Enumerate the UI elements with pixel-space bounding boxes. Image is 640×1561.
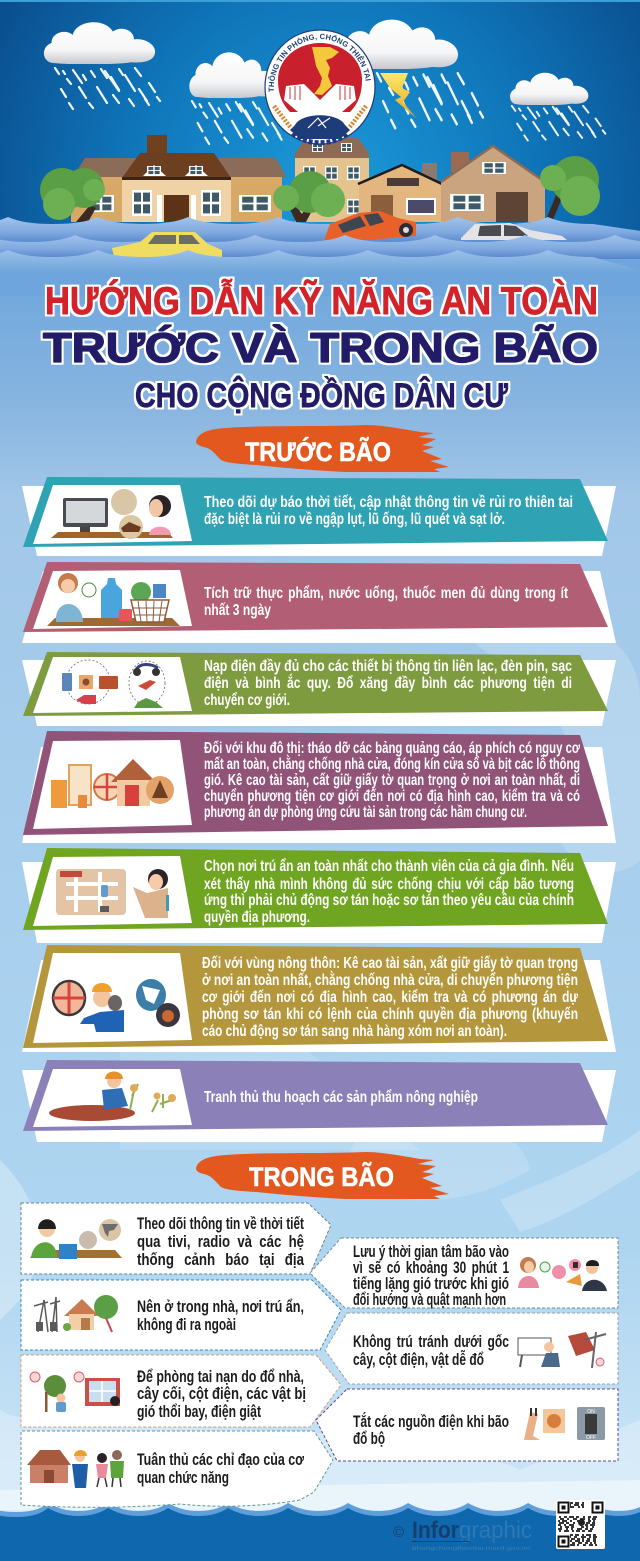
text [353,1412,509,1448]
text: không đi ra ngoài [137,1316,236,1334]
icon: man with radio [30,1219,122,1259]
cloud 3 [338,20,458,69]
text [137,1368,306,1421]
sky [0,0,640,240]
text [137,1451,304,1487]
icon: pylons, house, tree [34,1295,118,1332]
header scene [0,0,640,268]
text: tiếng lặng gió trước khi gió [353,1275,509,1293]
text: qua tivi, radio và các hệ [137,1233,304,1251]
lightning bolt [380,73,416,118]
icon: woman, bubbles, man with megaphone [518,1257,607,1291]
footer logo: Inforgraphic: graphic [459,1517,532,1544]
title [43,279,598,415]
text: thống cảnh báo tại địa [137,1251,305,1269]
text [137,1298,304,1334]
rain 3 [377,73,483,128]
tree centre [273,171,345,222]
text: cây cối, cột điện, các vật bị [137,1385,306,1403]
logo laurel left [274,106,291,128]
text: Tuân thủ các chỉ đạo của cơ [137,1451,304,1469]
white car [461,223,567,240]
heading: Trong bão [196,1152,449,1199]
text: đổi hướng và quật mạnh hơn [353,1291,506,1309]
text: chuyển cơ giới. [204,692,290,709]
card: stay indoors [21,1280,341,1350]
icon: devices and fuel [62,660,165,708]
wave band [0,1503,640,1561]
logo map of Vietnam [312,47,339,95]
icon: building and evacuees [27,1450,124,1488]
text [204,494,573,528]
card: no sheltering under trees [325,1313,618,1384]
text: nhất 3 ngày [204,602,271,619]
text: quan chức năng [137,1469,229,1487]
panel: harvest [22,1060,616,1142]
card: storm eye [310,1238,618,1309]
text [204,658,572,709]
card: follow authorities [21,1431,333,1507]
background swirls [0,620,640,1520]
icon: plug, socket and switch: OFF [586,1435,596,1441]
text: Theo dõi thông tin về thời tiết [137,1215,304,1233]
panel: weather forecast [22,477,616,556]
cloud 1 [44,22,155,64]
footer logo: Inforgraphic: Infor [412,1517,459,1544]
logo gear and mountain [290,115,350,143]
footer logo: Inforgraphic: phongchongthientai.mard.gov.vn [412,1546,530,1552]
icon: farmer in field [49,1072,176,1121]
title line 2: TRƯỚC VÀ TRONG BÃO [43,323,598,371]
footer logo: Inforgraphic: © [393,1524,404,1541]
text: Không trú tránh dưới gốc [353,1333,509,1351]
heading: Trong bão: TRONG BÃO [249,1161,394,1192]
text [353,1243,509,1309]
panel: urban areas [22,731,616,843]
house: small wood [358,163,442,222]
cloud 2 [189,52,278,98]
logo laurel right [349,106,366,128]
orange car [324,211,416,240]
text: đặc biệt là rủi ro về ngập lụt, lũ ống, lũ quét và sạt lở. [204,511,505,528]
card: follow news [21,1203,331,1274]
icon: man, billboard, flying roof [518,1332,606,1368]
QR code [556,1500,605,1549]
logo red disc [278,43,362,112]
icon: worker with megaphone [53,979,180,1032]
cloud 4 [510,73,588,105]
water layer 1 [0,217,640,244]
panel: stockpile [22,562,616,643]
heading: Trước bão: TRƯỚC BÃO [245,436,391,467]
rain 4 [512,106,605,140]
text: vì sẽ có khoảng 30 phút 1 [353,1259,509,1277]
text: Lưu ý thời gian tâm bão vào [353,1243,509,1261]
text: đổ bộ [353,1430,385,1448]
icon: plug, socket and switch: ON [587,1409,595,1415]
tree right [540,156,600,222]
panel: choose shelter [22,848,616,943]
text: cây, cột điện, vật dễ đổ [353,1350,484,1369]
text: Tranh thủ thu hoạch các sản phẩm nông nghiệp [204,1089,478,1106]
text [204,858,574,926]
text [202,955,579,1040]
text: cáo chủ động sơ tán sang nhà hàng xóm nơi an toàn). [202,1023,507,1040]
icon: supplies and shopper [47,573,180,626]
footer logo: Inforgraphic [393,1517,532,1552]
card: prevent accidents [21,1355,341,1427]
water layer 3 [0,250,640,296]
text: Để phòng tai nạn do đổ nhà, [137,1368,304,1386]
card: switch off power [316,1389,618,1461]
text [204,585,568,619]
rain 2 [192,101,292,144]
heading: Trước bão [196,425,449,472]
house: left manor [71,135,286,222]
text [353,1333,509,1369]
text: gió thổi bay, điện giật [137,1403,261,1421]
icon: plug, socket and switch [524,1407,605,1441]
yellow car [112,232,222,257]
panel: rural areas [22,945,616,1052]
icon: fallen tree and broken window [30,1372,120,1412]
bottom footer waves [0,1480,640,1561]
house: right gable [441,146,545,222]
house: centre tall [295,138,369,222]
text: Tắt các nguồn điện khi bão [353,1412,509,1431]
text [137,1215,305,1269]
panel: charge devices [22,652,616,726]
text: quyền địa phương. [204,909,310,926]
rain 1 [55,68,160,109]
icon: woman at computer [51,489,173,539]
tree left [40,168,105,222]
title line 3: CHO CỘNG ĐỒNG DÂN CƯ [135,376,509,415]
logo emblem [264,29,376,146]
text [204,740,581,821]
water layer 2 [0,235,640,259]
icon: map and woman [56,869,169,918]
text: Nên ở trong nhà, nơi trú ẩn, [137,1298,304,1316]
logo ring text: THÔNG TIN PHÒNG, CHỐNG THIÊN TAI [268,34,371,92]
logo hands [284,84,356,112]
icon: billboards and house [51,759,174,808]
wave body [0,1508,640,1561]
